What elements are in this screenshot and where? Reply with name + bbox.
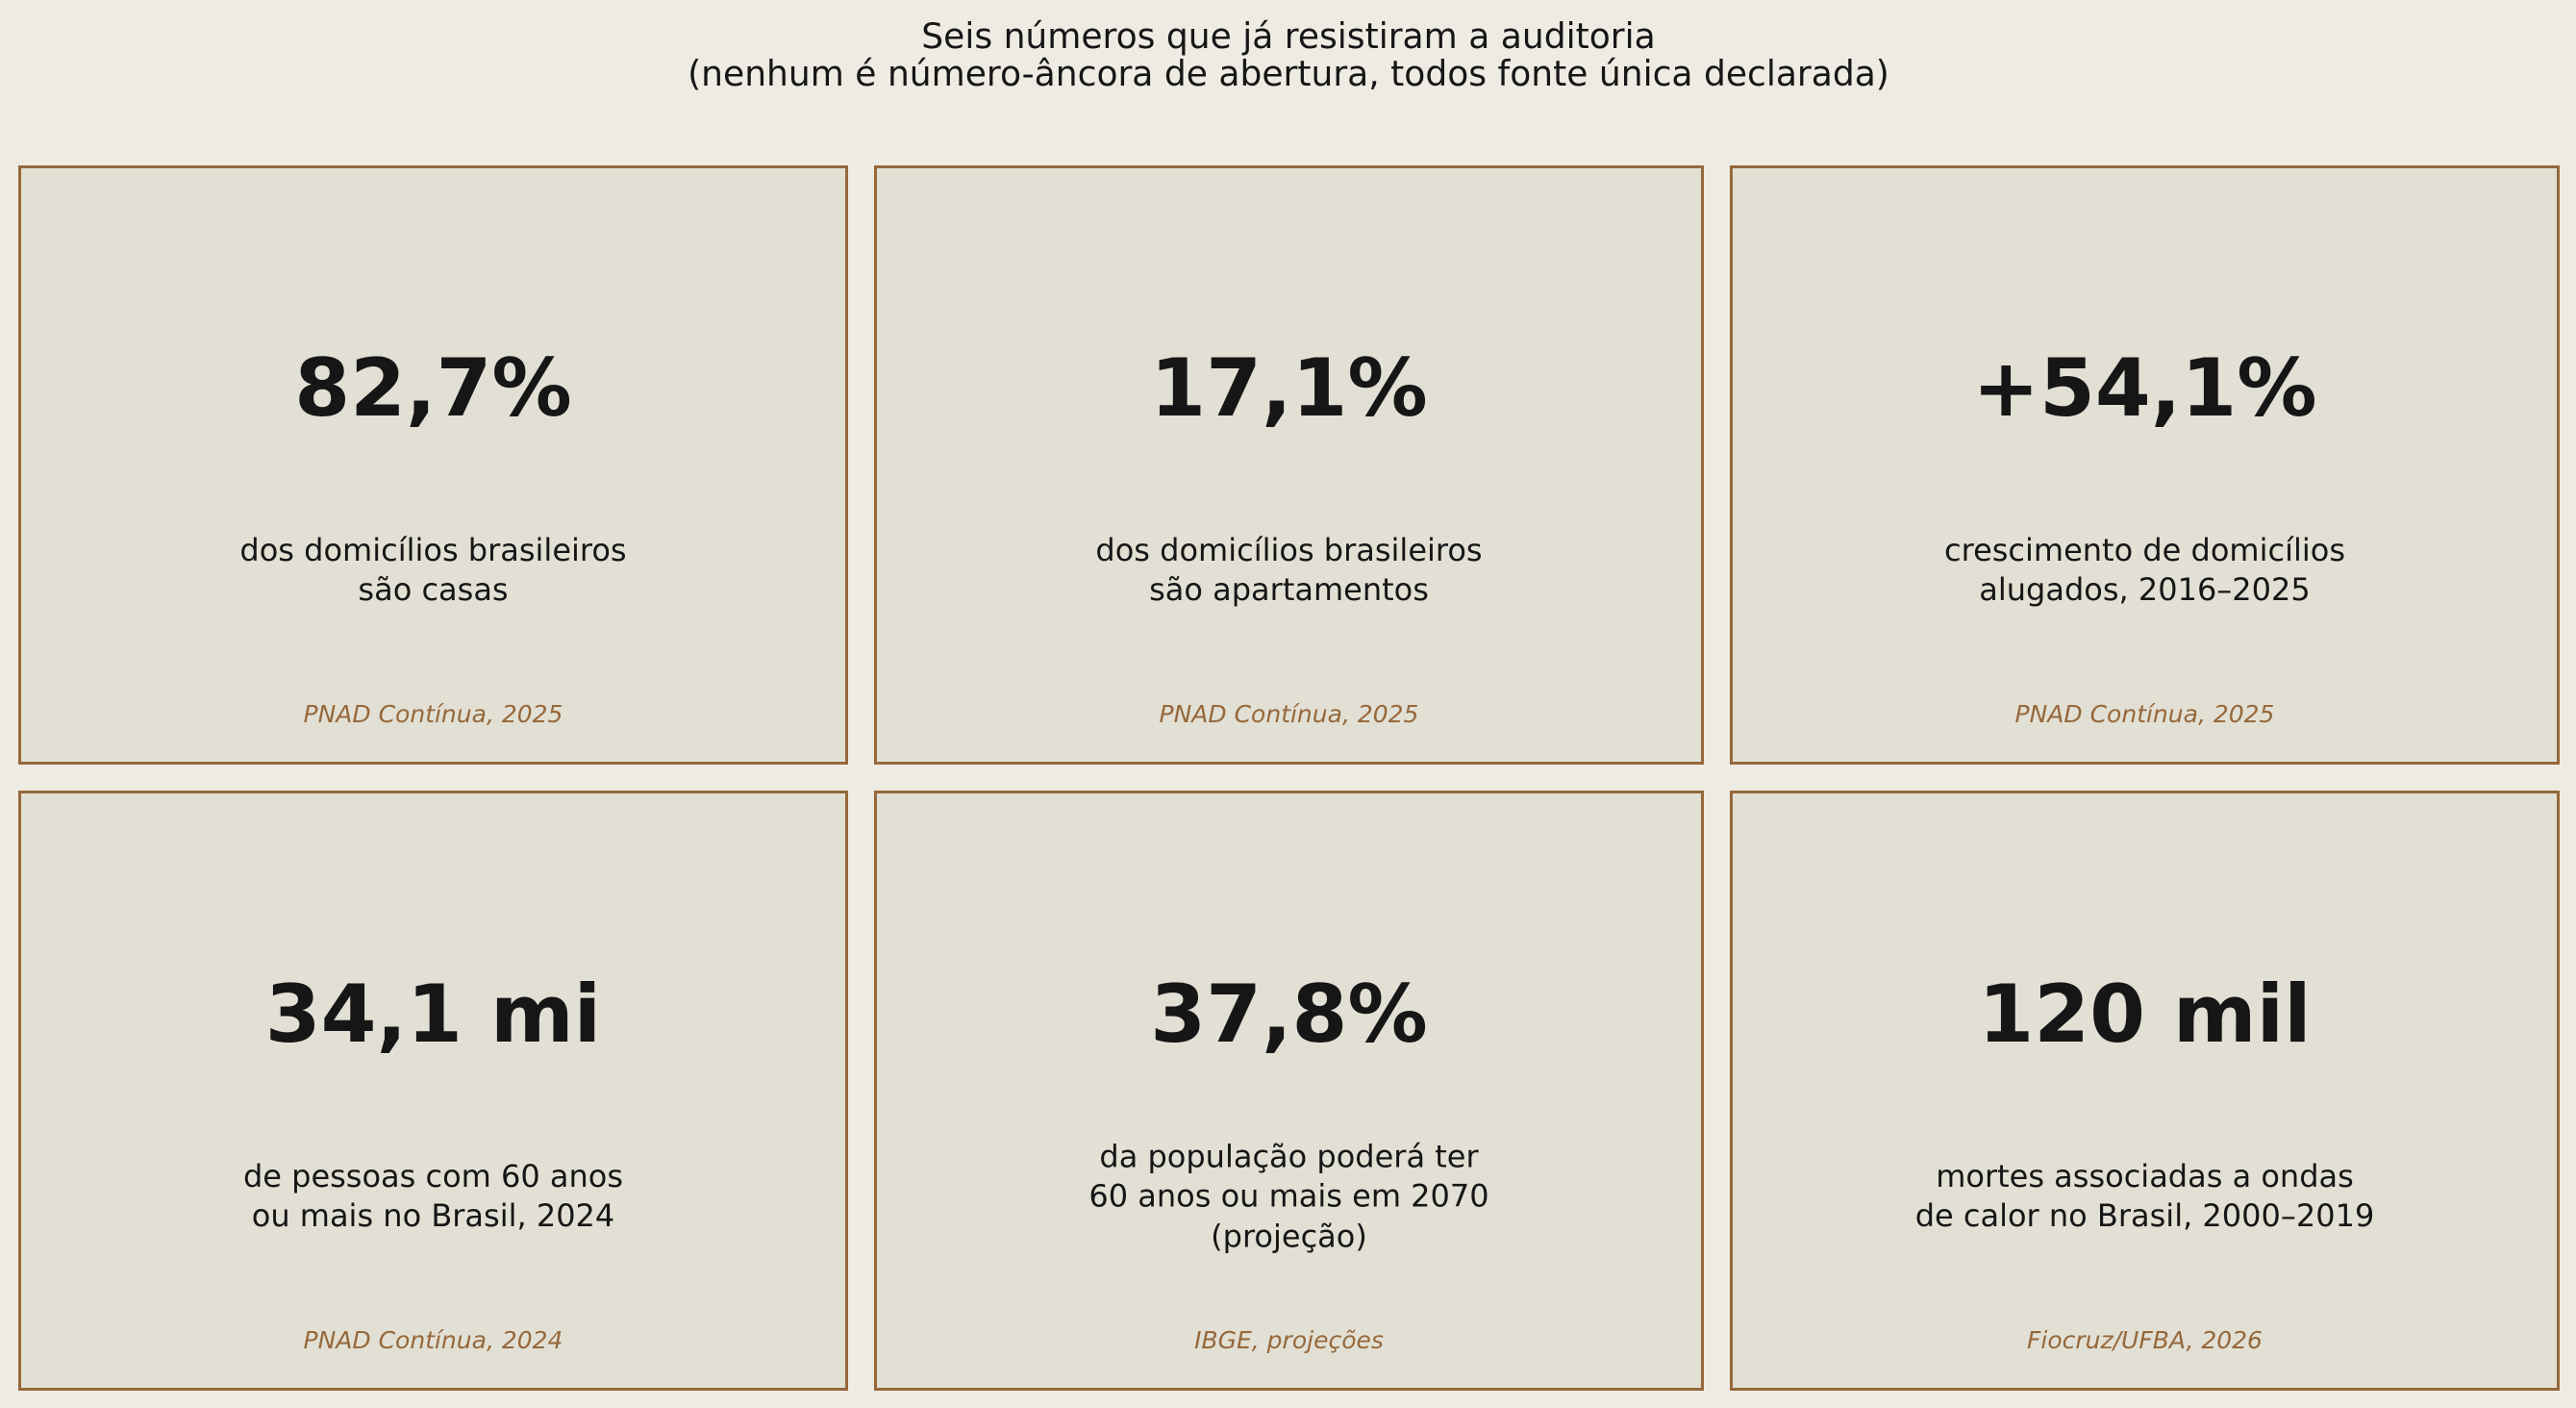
stat: 120 mil: 120 mil (1978, 968, 2312, 1061)
title (688, 16, 1889, 94)
panel: idosos (19, 792, 846, 1389)
description: apartamentos: dos domicílios brasileiros (1095, 532, 1483, 568)
description: idosos: ou mais no Brasil, 2024 (252, 1197, 614, 1234)
source: PNAD 2025: PNAD Contínua, 2025 (2015, 700, 2274, 728)
description: projeção (1088, 1139, 1489, 1254)
source: PNAD 2025: PNAD Contínua, 2025 (304, 700, 563, 728)
stat: 37,8%: 37,8% (1150, 968, 1428, 1061)
description: casas (239, 532, 627, 608)
description: alugados: crescimento de domicílios (1944, 532, 2345, 568)
source: Fiocruz/UFBA: Fiocruz/UFBA, 2026 (2027, 1326, 2263, 1354)
title: Seis números que já resistiram a auditoria (921, 16, 1656, 57)
description: projeção: 60 anos ou mais em 2070 (1088, 1177, 1489, 1214)
description: projeção: da população poderá ter (1099, 1139, 1479, 1175)
description: calor: mortes associadas a ondas (1936, 1158, 2354, 1194)
description: apartamentos (1095, 532, 1483, 608)
panel: alugados (1731, 167, 2558, 764)
description: idosos: de pessoas com 60 anos (243, 1158, 623, 1194)
stat: +54,1%: +54,1% (1972, 341, 2317, 435)
description: calor: de calor no Brasil, 2000–2019 (1915, 1197, 2374, 1234)
source: PNAD 2024: PNAD Contínua, 2024 (304, 1326, 563, 1354)
description: alugados: alugados, 2016–2025 (1979, 571, 2311, 608)
stat: 82,7%: 82,7% (294, 341, 572, 435)
description: casas: dos domicílios brasileiros (239, 532, 627, 568)
source: IBGE: IBGE, projeções (1194, 1326, 1384, 1354)
stat: 34,1 mi: 34,1 mi (265, 968, 601, 1061)
description: apartamentos: são apartamentos (1149, 571, 1429, 608)
panel: apartamentos (875, 167, 1702, 764)
source: PNAD 2025: PNAD Contínua, 2025 (1160, 700, 1418, 728)
description: idosos (243, 1158, 623, 1234)
stat: 17,1%: 17,1% (1150, 341, 1428, 435)
title: (nenhum é número-âncora de abertura, todos fonte única declarada) (688, 54, 1889, 94)
description: casas: são casas (358, 571, 509, 608)
panel: calor (1731, 792, 2558, 1389)
description: alugados (1944, 532, 2345, 608)
panel: casas (19, 167, 846, 764)
panel: projeção (875, 792, 1702, 1389)
description: projeção: (projeção) (1211, 1218, 1367, 1254)
description: calor (1915, 1158, 2374, 1234)
